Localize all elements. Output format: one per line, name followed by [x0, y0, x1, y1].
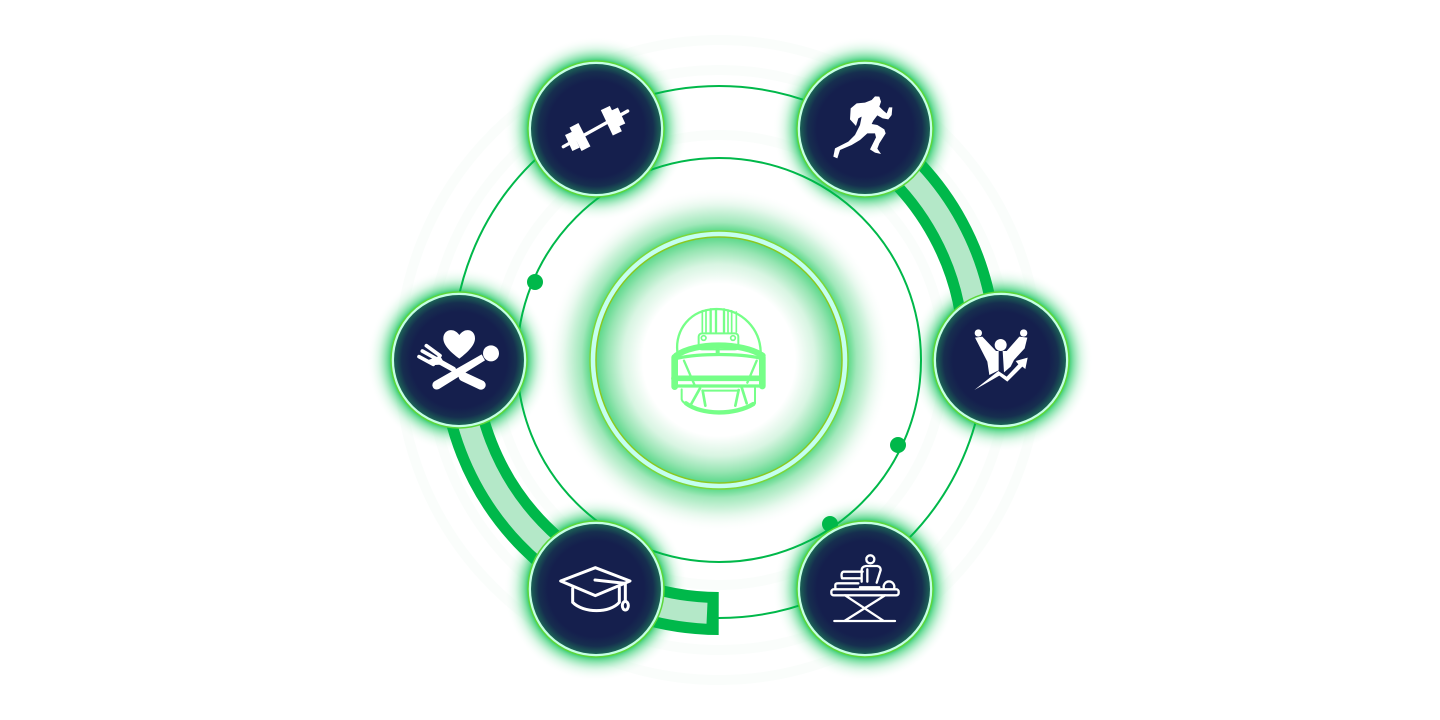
faint background rings — [399, 40, 1039, 680]
node: achievement — [933, 292, 1069, 428]
orbit dot bottom right — [822, 516, 838, 532]
node: education — [528, 521, 664, 657]
icon: football helmet — [674, 309, 763, 412]
thick progress arc: lower left — [458, 353, 719, 614]
icon: barbell — [563, 108, 628, 149]
inner orbit ring — [517, 158, 921, 562]
orbit dot upper left — [527, 274, 543, 290]
node glows — [367, 37, 1093, 681]
icon: running player — [833, 96, 892, 158]
thick progress arc: upper right — [861, 135, 980, 353]
orbit dot lower right — [890, 437, 906, 453]
center disc — [547, 188, 891, 532]
icon: heart, fork and spoon — [419, 330, 499, 390]
icon: winner with rising arrow — [974, 329, 1028, 390]
node: strength — [528, 61, 664, 197]
icon: graduation cap — [561, 568, 630, 611]
node: recovery — [797, 521, 933, 657]
node: speed — [797, 61, 933, 197]
outer orbit ring — [453, 86, 985, 618]
icon: massage table — [831, 555, 899, 621]
node: nutrition — [391, 292, 527, 428]
